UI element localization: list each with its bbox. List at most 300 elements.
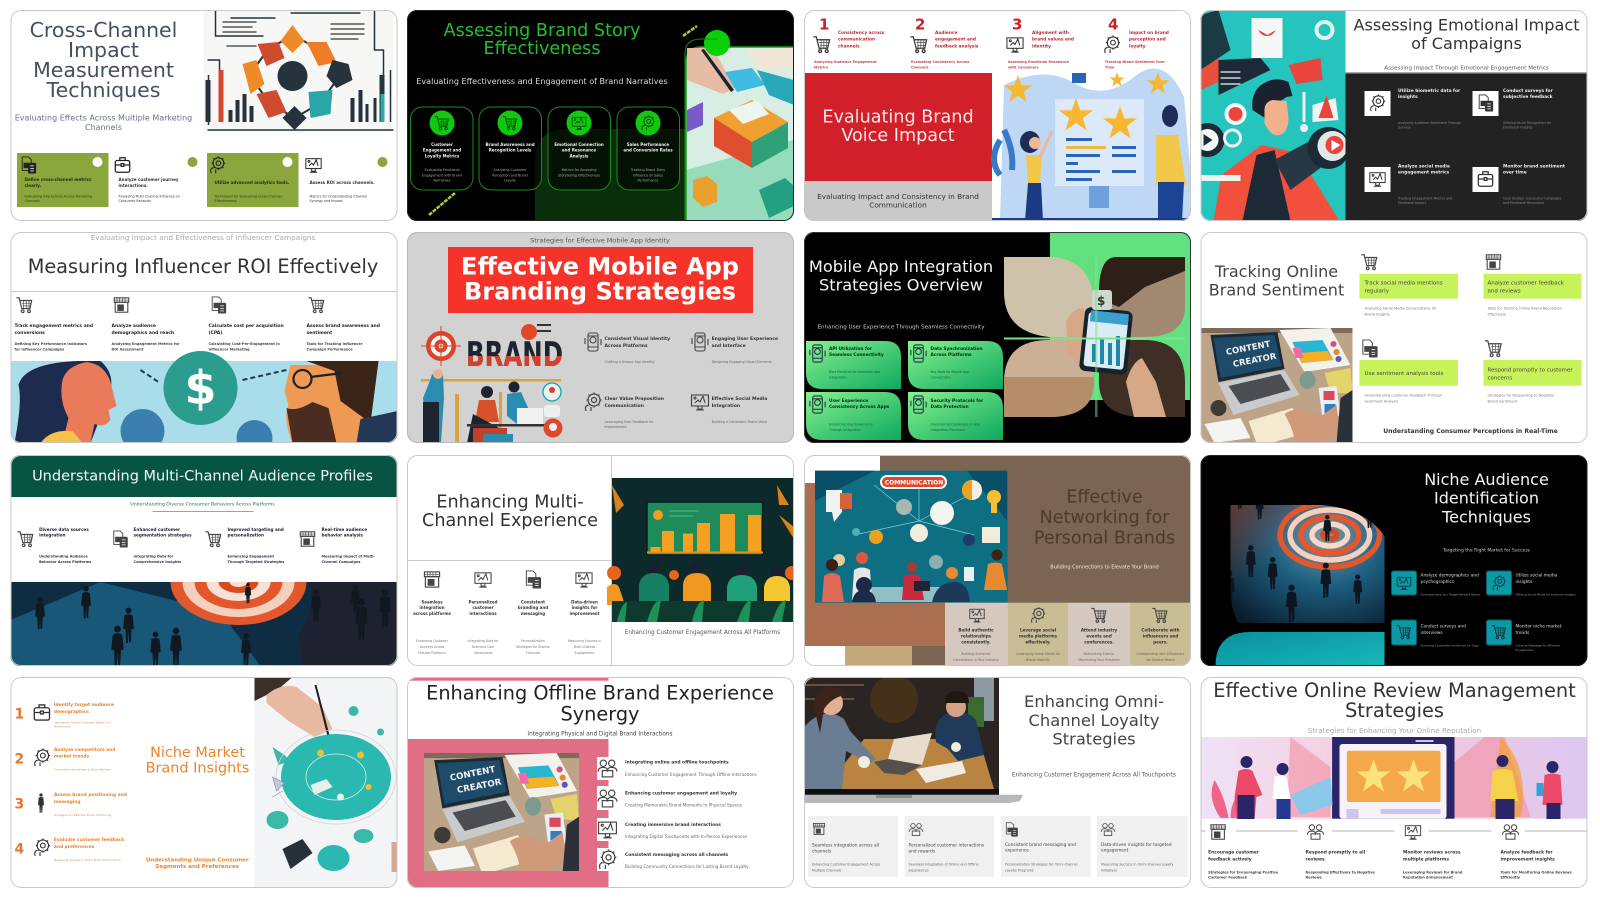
card: integration: Seamless integration across all bbox=[812, 843, 879, 849]
slide: Mobile App Integration Strategies Overview bbox=[804, 232, 1191, 443]
card: consistent messaging bbox=[1001, 816, 1091, 877]
item: integration: Journeys Across bbox=[419, 645, 445, 649]
step 3: messaging bbox=[54, 799, 81, 805]
item: segmentation bbox=[114, 527, 192, 564]
item: interactions: Interactions bbox=[474, 651, 493, 655]
item: social metrics: Tracking Engagement Metrics and bbox=[1397, 196, 1452, 200]
item: immersive: Creating immersive brand interactions bbox=[625, 822, 721, 828]
item: branding: Strategies for Diverse bbox=[516, 645, 550, 649]
card: emotional connection: Storytelling Effectiveness bbox=[558, 173, 600, 177]
item: surveys: interviews bbox=[1420, 630, 1443, 636]
column: influencers: for Greater Reach bbox=[1146, 658, 1175, 662]
item: targeting: Enhancing Engagement bbox=[228, 554, 274, 558]
item: value proposition: Communication bbox=[604, 403, 644, 409]
item 4: perception and bbox=[1129, 37, 1166, 43]
item: social media: Effective Social Media bbox=[712, 396, 767, 402]
card: engagement: Narratives bbox=[433, 179, 451, 183]
title: Impact bbox=[68, 38, 139, 62]
step 1: Preferences bbox=[54, 725, 71, 729]
item: value proposition bbox=[585, 392, 664, 429]
item 2: 2 bbox=[915, 16, 925, 34]
card: emotional connection: and Resonance bbox=[562, 148, 596, 153]
item: messaging bbox=[597, 848, 749, 871]
item: awareness: Assess brand awareness and bbox=[306, 323, 380, 329]
item: loyalty: Enhancing customer engagement and loyalty bbox=[625, 790, 737, 796]
image: content creator desk bbox=[1200, 328, 1352, 443]
item: monitor: Leveraging Reviews for Brand bbox=[1403, 870, 1463, 874]
item: monitor bbox=[1403, 826, 1463, 880]
image: crowd and target bbox=[10, 539, 398, 666]
colour blocks bbox=[804, 455, 1191, 666]
illustration: hand with colourful blocks bbox=[686, 47, 794, 221]
item: biometric: Surveys bbox=[1398, 125, 1411, 129]
slide: Enhancing Multi-Channel Experience bbox=[407, 455, 799, 666]
item: surveys bbox=[1392, 620, 1479, 648]
card: assess ROI: Assess ROI across channels. bbox=[310, 180, 375, 185]
item 2: engagement and bbox=[935, 37, 976, 43]
card: engagement: Engagement and bbox=[423, 148, 461, 153]
card: consistency: Consistency Across Apps bbox=[829, 404, 890, 410]
subtitle: Understanding Diverse Consumer Behaviors Across Platforms bbox=[130, 502, 275, 508]
title: Personal Brands bbox=[1034, 528, 1175, 548]
item: branding bbox=[516, 571, 550, 655]
step 2: 2 bbox=[14, 752, 24, 768]
title: Effective bbox=[1066, 487, 1143, 507]
column: relationships: Connections in Your Industry bbox=[953, 658, 999, 662]
item 4: Time bbox=[1105, 66, 1115, 70]
title: of Campaigns bbox=[1411, 34, 1522, 53]
title: Synergy bbox=[561, 702, 639, 725]
illustration: BRAND team: BRAND bbox=[466, 335, 563, 375]
column: social platforms: media platforms bbox=[1019, 634, 1058, 639]
card: security: Security Protocols for bbox=[930, 398, 984, 404]
item: analyze: Analyze feedback for bbox=[1500, 850, 1554, 856]
card: analyze journey bbox=[114, 157, 198, 202]
item: respond: Strategies for Responding to Negative bbox=[1488, 393, 1554, 397]
item: demographics: Understanding Your Target Market's Needs bbox=[1420, 593, 1480, 597]
item: engagement metrics: conversions bbox=[14, 330, 45, 336]
item 3 bbox=[1007, 16, 1074, 70]
card: engagement: Loyalty Metrics bbox=[425, 153, 460, 158]
illustration: communication meeting bbox=[815, 471, 1008, 603]
title banner: Branding Strategies bbox=[464, 278, 736, 306]
item: mentions: Track social media mentions bbox=[1364, 281, 1443, 287]
item: monitor: Monitor reviews across bbox=[1403, 850, 1461, 856]
slide: Tracking Online Brand Sentiment bbox=[1200, 232, 1588, 443]
card: API bbox=[806, 341, 901, 389]
subtitle: Assessing Impact Through Emotional Engagement Metrics bbox=[1384, 65, 1549, 71]
item: sentiment tools: Use sentiment analysis tools bbox=[1364, 371, 1444, 377]
title banner bbox=[448, 247, 753, 313]
item 1: communication bbox=[838, 37, 875, 43]
item: sentiment tools: Sentiment Analysis bbox=[1364, 399, 1398, 403]
item: social insights bbox=[1486, 571, 1576, 597]
grey subtitle panel: Communication bbox=[869, 201, 927, 210]
item: surveys bbox=[1472, 88, 1554, 129]
card: define metrics: Define cross-channel metrics bbox=[24, 177, 92, 182]
item: CPA: (CPA) bbox=[208, 330, 222, 336]
illustration: two faces and dollar coin: $ bbox=[184, 361, 217, 415]
item: trends bbox=[1486, 620, 1562, 652]
item: demographics: demographics and reach bbox=[112, 330, 174, 336]
item: feedback bbox=[1484, 255, 1582, 316]
item: user experience bbox=[692, 333, 778, 364]
item: segmentation: Comprehensive Insights bbox=[134, 560, 181, 564]
item: encourage feedback bbox=[1208, 825, 1279, 880]
title: Assessing Brand Story bbox=[444, 21, 640, 41]
column: relationships bbox=[945, 603, 1008, 666]
title: Tracking Online bbox=[1214, 262, 1338, 281]
item 1 bbox=[813, 16, 885, 70]
item 2: feedback analysis bbox=[935, 43, 979, 49]
step 3: Strategies for Effective Brand Positioning bbox=[54, 813, 112, 817]
card: security bbox=[908, 392, 1003, 440]
item 4: Impact on brand bbox=[1129, 30, 1169, 36]
red title panel bbox=[804, 73, 992, 181]
column: relationships: Build authentic bbox=[958, 628, 994, 633]
title: Brand Insights bbox=[146, 760, 249, 776]
illustration: BRAND team bbox=[421, 324, 563, 443]
item: targeting: personalization bbox=[228, 533, 264, 538]
item: social metrics bbox=[1364, 164, 1452, 205]
item: insights: Engagement bbox=[575, 651, 595, 655]
item: surveys: Conduct surveys for bbox=[1503, 88, 1554, 94]
red title panel: Voice Impact bbox=[841, 126, 955, 146]
item: interactions: customer bbox=[472, 605, 494, 610]
item: monitor: Reputation Enhancement bbox=[1403, 876, 1453, 880]
footer caption: Understanding Consumer Perceptions in Real-Time bbox=[1383, 428, 1558, 435]
item: feedback: and reviews bbox=[1488, 289, 1521, 295]
card: sync: Across Platforms bbox=[930, 352, 972, 358]
card: awareness: Perception and Brand bbox=[492, 173, 528, 177]
item: sentiment tools bbox=[1360, 340, 1458, 403]
card: analytics tools bbox=[207, 153, 298, 207]
column: social platforms bbox=[1008, 603, 1068, 666]
item 4: 4 bbox=[1108, 16, 1118, 34]
card: emotional connection: Emotional Connection bbox=[554, 142, 604, 147]
title: Effective Online Review Management bbox=[1213, 679, 1576, 702]
item: demographics: psychographics bbox=[1420, 579, 1455, 585]
item: respond: reviews bbox=[1306, 856, 1325, 862]
title: Enhancing Offline Brand Experience bbox=[426, 682, 774, 705]
item: social insights: Utilize social media bbox=[1516, 573, 1558, 579]
item: integration: Multiple Platforms bbox=[418, 651, 446, 655]
item 3: identity bbox=[1032, 43, 1051, 49]
column: events: Networking Events: bbox=[1083, 652, 1115, 656]
item: encourage feedback: Encourage customer bbox=[1208, 850, 1260, 856]
step 1: demographics bbox=[54, 709, 89, 715]
item: visual identity: Across Platforms bbox=[604, 343, 648, 349]
step 2 bbox=[14, 747, 115, 772]
card: sales: and Conversion Rates bbox=[623, 148, 673, 153]
item: segmentation: segmentation strategies bbox=[134, 533, 192, 538]
card: integration: Multiple Channels bbox=[812, 868, 842, 872]
title: Identification bbox=[1434, 489, 1539, 508]
item: interactions bbox=[468, 573, 499, 655]
card: API: Seamless Connectivity bbox=[829, 352, 884, 358]
item: visual identity bbox=[585, 333, 670, 364]
item: value proposition: Leveraging User Feedback for bbox=[604, 420, 654, 424]
card: awareness bbox=[479, 107, 542, 190]
illustration: audience watching bar chart bbox=[607, 478, 799, 622]
subtitle: Building Connections to Elevate Your Brand bbox=[1050, 565, 1159, 571]
column: relationships: Building Authentic bbox=[961, 652, 991, 656]
item: awareness: Tools for Tracking Influencer bbox=[306, 342, 363, 346]
item: analyze: Efficiently bbox=[1500, 876, 1521, 880]
card: insights bbox=[1097, 816, 1188, 877]
card: sales: Tracking Brand Story bbox=[630, 168, 665, 172]
slide: Cross-Channel Impact Measurement Techniques bbox=[10, 10, 398, 221]
item: trends: Monitor niche market bbox=[1516, 624, 1562, 630]
item: mentions: Analyzing Social Media Conversations for bbox=[1364, 307, 1437, 311]
item 2 bbox=[910, 16, 979, 70]
column: social platforms: Leverage social bbox=[1020, 628, 1057, 633]
title: Assessing Emotional Impact bbox=[1353, 16, 1580, 35]
item 1: Consistency across bbox=[838, 30, 885, 36]
item: monitor: multiple platforms bbox=[1403, 856, 1449, 862]
card: awareness: Loyalty bbox=[504, 179, 516, 183]
item: awareness: Campaign Performance bbox=[306, 347, 353, 351]
subtitle: Channels bbox=[85, 123, 122, 132]
item: loyalty bbox=[597, 786, 742, 810]
slide: Assessing Brand Story Effectiveness bbox=[407, 10, 794, 221]
item: respond: Respond promptly to customer bbox=[1488, 367, 1573, 373]
item: social media bbox=[692, 395, 767, 424]
step 4 bbox=[14, 837, 124, 862]
item: segmentation: Enhanced customer bbox=[134, 527, 181, 532]
item: data sources: Diverse data sources bbox=[39, 527, 89, 532]
card: consistent messaging: Loyalty Programs bbox=[1005, 868, 1034, 872]
title: Niche Market bbox=[150, 745, 245, 761]
title: Strategies Overview bbox=[819, 276, 983, 295]
item: insights bbox=[568, 573, 601, 655]
illustration: communication meeting: COMMUNICATION bbox=[885, 479, 943, 486]
card: personalized bbox=[904, 816, 994, 877]
card: integration: channels bbox=[812, 848, 832, 854]
dark panel bbox=[1346, 72, 1588, 221]
item 3: 3 bbox=[1012, 16, 1022, 34]
item: insights: Multi-Channel bbox=[574, 645, 595, 649]
subtitle: Targeting the Right Market for Success bbox=[1442, 548, 1531, 554]
step 1: Identifying Unique Consumer Needs and bbox=[54, 721, 111, 725]
item 3: Assessing Emotional Resonance bbox=[1008, 60, 1070, 64]
item: encourage feedback: Customer Feedback bbox=[1208, 876, 1248, 880]
card: security: Data Protection bbox=[930, 404, 969, 410]
item 4: loyalty bbox=[1129, 43, 1146, 49]
card: personalized: Seamless Integration of Online and Offline bbox=[908, 863, 978, 867]
image: couple at laptop bbox=[804, 675, 1023, 803]
column: influencers: Collaborate with bbox=[1141, 628, 1180, 633]
item: respond bbox=[1306, 825, 1375, 880]
item: integration: integration bbox=[419, 605, 445, 610]
column: influencers: Collaborating with Influencers bbox=[1137, 652, 1185, 656]
step 4: 4 bbox=[14, 842, 24, 858]
step 1: Identify target audience bbox=[54, 702, 114, 708]
item: social media: Integration bbox=[712, 403, 740, 409]
step 2: Analyze competitors and bbox=[54, 747, 115, 753]
item 2: Channels bbox=[911, 66, 928, 70]
column: social platforms: Leveraging Social Media for bbox=[1016, 652, 1061, 656]
red title panel: Evaluating Brand bbox=[822, 108, 974, 128]
item: surveys: Conduct surveys and bbox=[1420, 624, 1466, 630]
title: Strategies bbox=[1345, 699, 1444, 722]
item: engagement metrics: Track engagement metrics and bbox=[14, 323, 93, 329]
item 1: Metrics bbox=[814, 66, 828, 70]
image: content creator desk bbox=[424, 753, 579, 871]
card: emotional connection bbox=[548, 107, 610, 190]
card: consistency bbox=[806, 392, 901, 440]
title: Enhancing Multi- bbox=[436, 492, 584, 512]
card: API: API Utilization for bbox=[829, 346, 873, 352]
card: awareness: Analyzing Customer bbox=[493, 168, 527, 172]
item: insights: Measuring Success in bbox=[568, 639, 601, 643]
step 1: 1 bbox=[14, 706, 24, 722]
slide: Enhancing Omni-Channel Loyalty Strategies bbox=[804, 675, 1191, 888]
item: analyze bbox=[1500, 825, 1572, 880]
item: social metrics: Analyze social media bbox=[1398, 164, 1450, 170]
title: Enhancing Omni- bbox=[1024, 692, 1164, 711]
item: data sources: Understanding Audience bbox=[39, 554, 88, 558]
column: events: conferences. bbox=[1084, 640, 1114, 644]
item: CPA bbox=[208, 297, 284, 351]
item: feedback: Effectively bbox=[1488, 312, 1506, 316]
subtitle: Integrating Physical and Digital Brand Interactions bbox=[527, 731, 673, 737]
card: insights: Initiatives bbox=[1101, 868, 1117, 872]
item: demographics: Analyze demographics and bbox=[1420, 573, 1479, 579]
title: Brand Sentiment bbox=[1209, 280, 1344, 299]
item: surveys: Utilizing Facial Recognition for bbox=[1503, 121, 1552, 125]
column: social platforms: effectively. bbox=[1025, 640, 1051, 644]
illustration: phone in petals bbox=[1004, 257, 1185, 417]
item: engagement metrics: for Influencer Campaigns bbox=[14, 347, 64, 351]
item: behaviour: behavior analysis bbox=[322, 533, 363, 538]
green accent panel bbox=[1050, 232, 1191, 400]
title: Effectiveness bbox=[483, 39, 601, 59]
header band bbox=[10, 455, 398, 497]
card: consistent messaging: Consistent brand messaging and bbox=[1005, 842, 1076, 848]
slide: Evaluating Brand Voice Impact bbox=[804, 10, 1191, 221]
item: integration: Seamless bbox=[421, 599, 443, 604]
item: sentiment bbox=[1472, 164, 1565, 205]
item: insights: Data-driven bbox=[571, 599, 598, 604]
illustration: star reviews board bbox=[992, 69, 1191, 221]
item: branding: messaging bbox=[521, 611, 545, 616]
card: engagement: Customer bbox=[431, 142, 453, 147]
subtitle: Strategies for Effective Mobile App Identity bbox=[530, 237, 670, 245]
item: CPA: Calculating Cost-Per-Engagement in bbox=[208, 342, 280, 346]
grey subtitle panel bbox=[804, 181, 992, 221]
item: immersive bbox=[597, 818, 747, 841]
column: social platforms: Brand Visibility bbox=[1026, 658, 1050, 662]
card: assess ROI bbox=[305, 157, 388, 202]
title: Cross-Channel bbox=[30, 18, 177, 42]
item: mentions bbox=[1360, 255, 1458, 316]
step 4: and preferences bbox=[54, 844, 95, 850]
item: encourage feedback: Strategies for Encouraging Positive bbox=[1208, 870, 1279, 874]
item: respond: Responding Effectively to Negative bbox=[1306, 870, 1375, 874]
card: personalized: Personalized customer interactions bbox=[908, 843, 985, 849]
column: events bbox=[1068, 603, 1130, 666]
card: API: Best Practices for Seamless App bbox=[829, 370, 880, 374]
card: analytics tools: Utilize advanced analytics tools. bbox=[214, 180, 290, 185]
title: Channel Experience bbox=[422, 511, 598, 531]
item: branding: branding and bbox=[518, 605, 548, 610]
item: mentions: regularly bbox=[1364, 289, 1390, 295]
item 3: Alignment with bbox=[1032, 30, 1069, 36]
item: feedback: Analyze customer feedback bbox=[1488, 281, 1565, 287]
card: sales: Performance bbox=[638, 179, 658, 183]
item: branding: Channels bbox=[526, 651, 541, 655]
card: analytics tools: Techniques for Evaluating Cross-Channel bbox=[214, 194, 282, 198]
header band: Understanding Multi-Channel Audience Profiles bbox=[32, 469, 373, 485]
item: trends: trends bbox=[1516, 630, 1530, 636]
card: consistency: Through Integration bbox=[828, 428, 861, 432]
item: behaviour: Real-time audience bbox=[322, 527, 367, 532]
card: personalized: Experiences bbox=[908, 868, 929, 872]
card: API: Integration bbox=[829, 376, 847, 380]
card: analyze journey: Analyzing Multi-Channel Influence on bbox=[118, 194, 180, 198]
item: insights: insights for bbox=[572, 605, 597, 610]
step 4: Evaluate customer feedback bbox=[54, 837, 124, 843]
item: surveys: Analyzing Competitor Audiences for Gaps bbox=[1420, 644, 1479, 648]
grey subtitle panel: Evaluating Impact and Consistency in Brand bbox=[817, 192, 979, 201]
item: integration: Enhancing Customer bbox=[416, 639, 449, 643]
item: integration bbox=[413, 572, 452, 655]
illustration: star review phone bbox=[1200, 737, 1588, 819]
item 3: with Consumers bbox=[1008, 66, 1039, 70]
illustration: man with camera bbox=[1190, 10, 1350, 221]
item: behaviour bbox=[300, 527, 375, 564]
teal accent shape bbox=[1216, 632, 1384, 666]
title: Techniques bbox=[46, 78, 160, 102]
item: branding: Personalization bbox=[521, 639, 545, 643]
item: touchpoints: Enhancing Customer Engagement Through Offline Interactions bbox=[625, 772, 757, 777]
title: Techniques bbox=[1441, 507, 1531, 526]
card: insights: engagement bbox=[1101, 848, 1129, 854]
item: respond: concerns bbox=[1488, 375, 1512, 381]
item: social metrics: Emotional Impact bbox=[1398, 201, 1427, 205]
image: crowd and target shape bbox=[1216, 480, 1384, 623]
item: engagement metrics: Defining Key Performance Indicators bbox=[14, 342, 87, 346]
item: social metrics: engagement metrics bbox=[1398, 170, 1450, 176]
card: security: Integration Processes bbox=[930, 428, 965, 432]
title: Measurement bbox=[33, 58, 174, 82]
item: data sources: Behavior Across Platforms bbox=[39, 560, 91, 564]
item: awareness bbox=[306, 298, 380, 351]
item: insights: improvement bbox=[569, 611, 600, 616]
step 2: market trends bbox=[54, 754, 90, 760]
title banner: Effective Mobile App bbox=[461, 253, 739, 281]
step 2: Competitive Landscape in Niche Markets bbox=[54, 768, 112, 772]
card: emotional connection: Metrics for Assessing bbox=[562, 168, 596, 172]
item: awareness: sentiment bbox=[306, 330, 333, 336]
item: surveys: Emotional Insights bbox=[1503, 125, 1533, 129]
item: interactions: Integrating Data for bbox=[468, 639, 499, 643]
item 3: brand values and bbox=[1032, 37, 1074, 43]
item 1: 1 bbox=[819, 16, 829, 34]
item: demographics bbox=[112, 298, 180, 351]
column: influencers: influencers and bbox=[1143, 634, 1178, 639]
item: respond: Respond promptly to all bbox=[1306, 850, 1366, 856]
item: messaging: Building Community Connections for Lasting Brand Loyalty bbox=[625, 864, 749, 869]
step 3: Assess brand positioning and bbox=[54, 792, 127, 798]
subtitle: Strategies for Enhancing Your Online Reputation bbox=[1308, 726, 1481, 735]
item: messaging: Consistent messaging across all channels bbox=[625, 852, 729, 858]
item: sentiment: Monitor brand sentiment bbox=[1503, 164, 1565, 170]
title: Niche Audience bbox=[1424, 470, 1549, 489]
item: encourage feedback: feedback actively bbox=[1208, 856, 1252, 862]
slide: Niche Market Brand Insights bbox=[10, 677, 398, 888]
